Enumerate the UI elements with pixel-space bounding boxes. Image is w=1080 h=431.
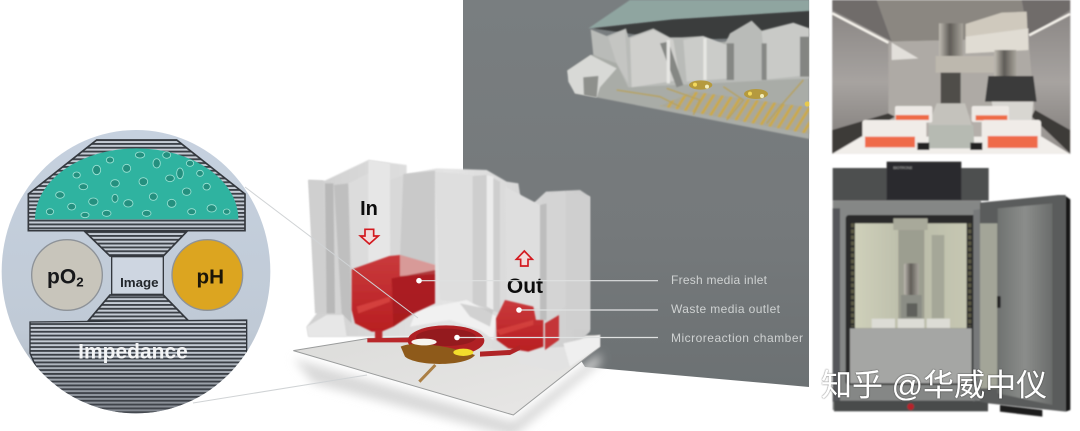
cabinet frame: [833, 201, 981, 410]
callout: microreaction chamber: Microreaction chamber: [671, 331, 803, 345]
disc background: [2, 130, 270, 413]
pH sensor: [172, 240, 243, 310]
red fluid: outlet well: [496, 300, 559, 352]
callout: fresh media inlet: Fresh media inlet: [671, 273, 768, 287]
chip base plate: [567, 33, 809, 139]
door black edge: [1066, 196, 1070, 412]
pO2 sensor: 2: [76, 275, 84, 290]
lower connecting stripes: [88, 295, 188, 321]
red microreaction channels and chamber: [367, 325, 520, 357]
red fluid: inlet well: [352, 255, 435, 340]
label: Image: Image: [120, 275, 159, 290]
label: Out: Out: [507, 275, 543, 298]
clear wells: [591, 21, 809, 87]
callout: microreaction chamber: [454, 331, 803, 345]
back wall: [888, 38, 1035, 117]
side racks: [853, 223, 970, 327]
pO2 sensor: pO: [47, 265, 76, 288]
watermark: 知乎 @华威中仪: [821, 368, 1047, 403]
soft shadow under chip: [293, 353, 600, 431]
top rail: [893, 218, 928, 230]
chamber interior: [832, 0, 1070, 154]
arrow: downward inlet: [360, 229, 378, 244]
light strips: [832, 13, 1070, 43]
back panels: [898, 230, 944, 323]
panel: grey product backdrop: [463, 0, 809, 387]
open door: [980, 195, 1066, 412]
base plate: [293, 335, 600, 415]
thin gold leads: [617, 80, 803, 123]
tower wall shading: [307, 160, 600, 372]
sample plates: [872, 319, 950, 328]
brown sensor disc with tail: [401, 339, 475, 382]
left wall: [832, 10, 888, 130]
top hood: [833, 168, 989, 201]
pO2 sensor: [32, 240, 102, 310]
dark lower walls: [832, 110, 1070, 153]
upper corners: [832, 0, 1070, 42]
door latch: [997, 296, 1001, 308]
clear plate corner: [567, 55, 617, 97]
lower drawer: [850, 328, 972, 383]
chamber interior: [855, 223, 967, 328]
top control module: [887, 162, 961, 200]
pipette head: [985, 76, 1037, 121]
door foot: [1000, 405, 1042, 417]
upper connecting stripes: [85, 232, 187, 256]
image window: [112, 257, 163, 294]
ceiling: [877, 0, 1028, 42]
impedance electrode: [27, 319, 248, 414]
pipette rack: [928, 125, 974, 148]
dark chamber opening: [846, 215, 977, 385]
sensor disc: [0, 130, 273, 420]
red media plates: [862, 106, 1041, 150]
cell culture image: [35, 148, 238, 219]
image: microplate chip with gold electrodes: [567, 0, 810, 139]
label: Impedance: Impedance: [78, 341, 188, 364]
callout: waste media outlet: [516, 302, 781, 316]
door window section: [980, 223, 997, 388]
back wall light glow: [892, 43, 918, 60]
connector lines from sensor disc to chip: [193, 187, 418, 403]
dark well interior: [593, 11, 809, 40]
cross-section of microfluidic well: [293, 160, 600, 431]
arrow: upward outlet: [516, 251, 532, 266]
callout: fresh media inlet: [416, 273, 768, 287]
right wall: [1028, 10, 1070, 130]
gold electrode traces: [660, 92, 809, 134]
table surface: [832, 137, 1070, 154]
corner post: [583, 76, 598, 97]
gold sensor pads: [689, 80, 810, 107]
door inner edge: [973, 207, 998, 402]
dark left side: [833, 208, 840, 402]
top striped electrode: [28, 140, 245, 231]
bottom plinth: [834, 401, 988, 411]
photo: incubator instrument: [833, 162, 1070, 417]
door inner panel: [998, 203, 1052, 405]
robot column: [928, 23, 994, 125]
callout: waste media outlet: Waste media outlet: [671, 302, 781, 316]
label: In: In: [360, 198, 378, 220]
robot arm: [966, 12, 1028, 77]
glass lid: [588, 0, 809, 28]
pH sensor: pH: [197, 265, 224, 288]
microscope objective: [901, 263, 922, 318]
transparent tower body: [307, 160, 590, 357]
top control module: BIOTRONE: [893, 166, 913, 170]
photo: robotic liquid handler: [832, 0, 1070, 154]
